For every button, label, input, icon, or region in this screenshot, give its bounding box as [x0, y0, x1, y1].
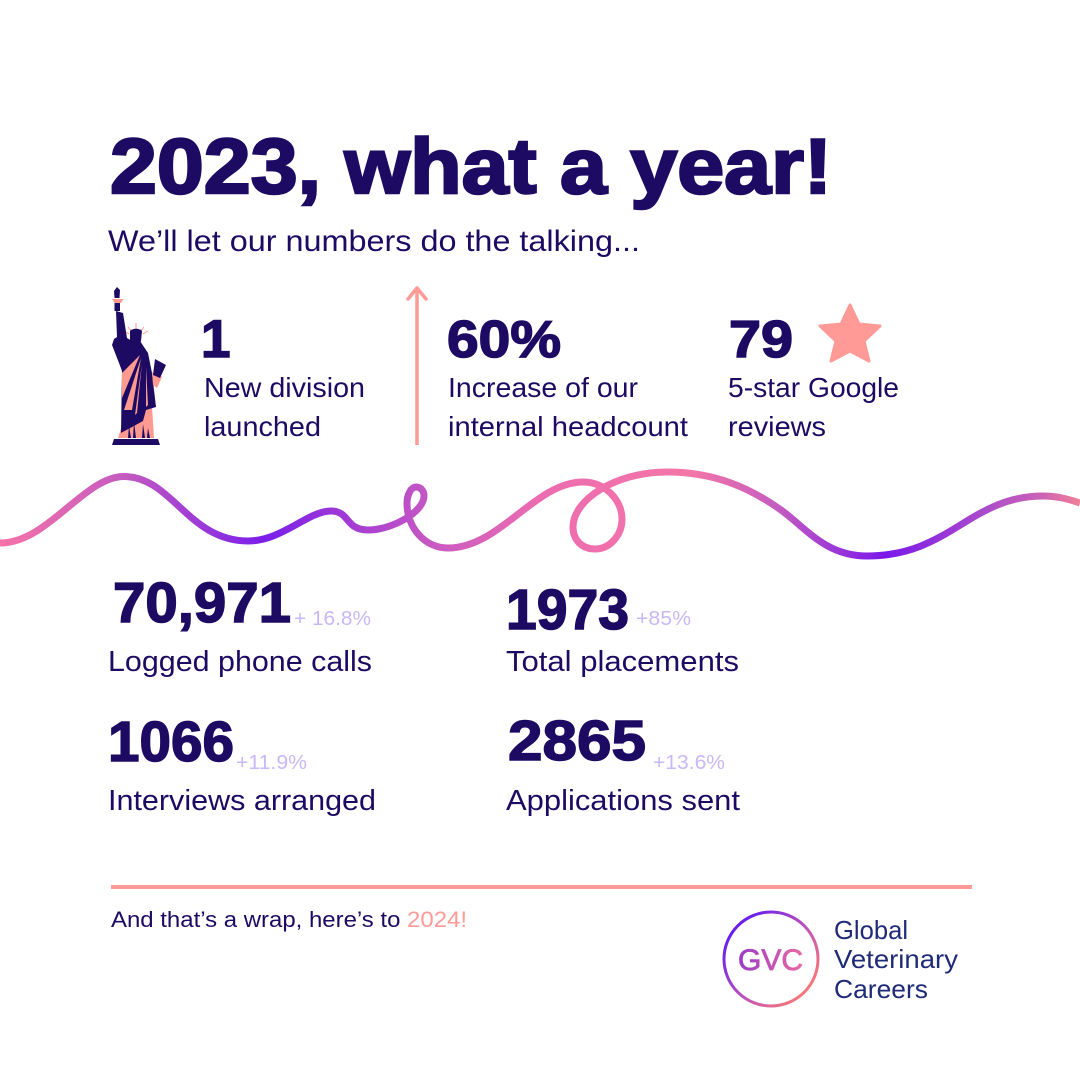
stat: interviews arranged — [108, 710, 376, 817]
stat: applications sent — [506, 709, 740, 817]
arrow: headcount increase — [408, 288, 426, 445]
closing line: And that’s a wrap, here’s to 2024! — [111, 907, 467, 932]
stat: logged phone calls: 70,971 — [113, 571, 291, 635]
logo: GVC: Global — [834, 915, 908, 945]
stat: new division: New division — [204, 372, 365, 403]
stat: interviews arranged: +11.9% — [236, 752, 307, 774]
stat: new division: 1 — [201, 310, 230, 369]
icon: star — [820, 305, 880, 361]
stat: google reviews — [728, 311, 899, 442]
footer rule — [111, 885, 972, 889]
stat: applications sent: 2865 — [508, 709, 646, 773]
icon: statue of liberty — [112, 287, 166, 445]
title: 2023, what a year! — [110, 122, 832, 210]
subtitle: We’ll let our numbers do the talking... — [108, 225, 640, 258]
stat: headcount — [447, 311, 688, 442]
logo: GVC: Careers — [834, 974, 928, 1004]
stat: applications sent: Applications sent — [506, 785, 740, 817]
stat: total placements — [506, 578, 739, 678]
stat: headcount: Increase of our — [448, 372, 638, 403]
stat: logged phone calls — [108, 571, 372, 678]
stat: google reviews: 5-star Google — [728, 372, 899, 403]
logo: GVC: GVC — [738, 944, 803, 977]
stat: google reviews: 79 — [729, 311, 793, 369]
wavy line divider — [0, 472, 1080, 556]
stat: headcount: internal headcount — [448, 411, 688, 442]
stat: google reviews: reviews — [728, 411, 826, 442]
stat: applications sent: +13.6% — [653, 752, 725, 774]
stat: new division: launched — [204, 411, 321, 442]
stat: total placements: 1973 — [506, 578, 629, 642]
stat: interviews arranged: 1066 — [108, 710, 234, 774]
logo: GVC: Veterinary — [834, 944, 958, 974]
stat: new division — [201, 310, 365, 442]
logo: GVC — [724, 912, 958, 1006]
stat: total placements: Total placements — [506, 646, 739, 678]
stat: logged phone calls: Logged phone calls — [108, 646, 372, 678]
stat: total placements: +85% — [636, 608, 691, 630]
stat: headcount: 60% — [447, 311, 561, 369]
stat: interviews arranged: Interviews arranged — [108, 785, 376, 817]
stat: logged phone calls: + 16.8% — [294, 608, 371, 630]
